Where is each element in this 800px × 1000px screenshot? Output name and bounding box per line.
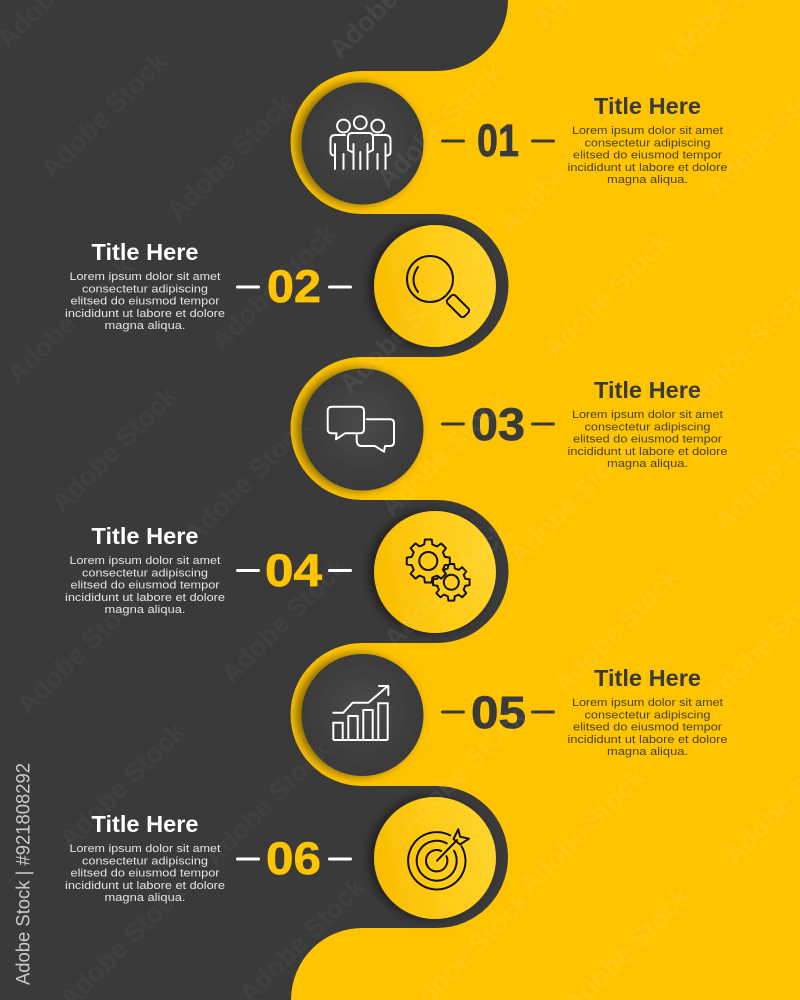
icon: chat bubbles — [328, 407, 394, 452]
watermarks on yellow area — [323, 0, 800, 1000]
body 05: incididunt ut labore et dolore — [568, 734, 728, 746]
body 03: incididunt ut labore et dolore — [568, 446, 728, 458]
title 01: Title Here — [594, 93, 701, 119]
step 04 circle — [374, 511, 496, 633]
body 04: magna aliqua. — [104, 604, 186, 616]
watermarks on dark area: Adobe Stock — [198, 734, 337, 872]
watermarks on dark area: Adobe Stock — [1, 251, 140, 389]
watermarks on dark area — [0, 0, 372, 1000]
watermarks on yellow area: Adobe Stock — [538, 226, 677, 364]
body 02: magna aliqua. — [104, 320, 186, 332]
step 03 label — [441, 377, 728, 470]
body 06 — [65, 843, 225, 904]
number 01: 01 — [477, 115, 519, 166]
title 06: Title Here — [92, 811, 198, 837]
step 06 circle — [374, 797, 496, 919]
step 04 label — [65, 523, 352, 616]
body 06: elitsed do eiusmod tempor — [70, 868, 220, 880]
watermarks on dark area: Adobe Stock — [35, 46, 174, 184]
body 02: incididunt ut labore et dolore — [65, 308, 225, 320]
number 05: 05 — [471, 687, 526, 738]
left dash 06 — [236, 858, 260, 860]
step 05 label — [441, 665, 728, 758]
body 02: Lorem ipsum dolor sit amet — [70, 271, 221, 283]
step 01 label — [441, 93, 728, 186]
right dash 06 — [328, 858, 352, 860]
icon: people — [330, 116, 390, 169]
watermarks on dark area: Adobe Stock — [215, 551, 354, 689]
left dash 02 — [236, 286, 260, 288]
right dash 03 — [531, 422, 555, 426]
body 01: magna aliqua. — [607, 174, 688, 186]
step 02 circle — [374, 225, 496, 347]
step 05 circle — [302, 654, 424, 776]
watermarks on yellow area: Adobe Stock — [371, 56, 510, 194]
body 05: elitsed do eiusmod tempor — [573, 722, 722, 734]
body 04 — [65, 555, 225, 616]
watermarks on yellow area: Adobe Stock — [378, 516, 517, 654]
body 03: elitsed do eiusmod tempor — [573, 434, 722, 446]
number 06: 06 — [266, 833, 321, 884]
number 03: 03 — [471, 399, 525, 450]
body 06: Lorem ipsum dolor sit amet — [70, 843, 221, 855]
body 03: Lorem ipsum dolor sit amet — [572, 409, 724, 421]
icon: gears — [407, 539, 470, 601]
body 04: consectetur adipiscing — [82, 567, 208, 579]
watermarks on yellow area: Adobe Stock — [503, 432, 642, 570]
body 02: elitsed do eiusmod tempor — [70, 296, 220, 308]
watermarks on dark area: Adobe Stock — [178, 411, 317, 549]
right dash 02 — [328, 286, 352, 288]
watermarks on dark area: Adobe Stock — [11, 582, 150, 720]
watermarks on yellow area: Adobe Stock — [493, 101, 632, 239]
left dash 01 — [441, 140, 465, 142]
body 05: consectetur adipiscing — [584, 709, 710, 721]
body 03: magna aliqua. — [607, 458, 688, 470]
watermarks on yellow area: Adobe Stock — [393, 701, 532, 839]
left dash 04 — [236, 569, 260, 572]
body 06: incididunt ut labore et dolore — [65, 880, 225, 892]
watermarks on yellow area: Adobe Stock — [513, 762, 652, 900]
body 01: elitsed do eiusmod tempor — [573, 150, 722, 162]
side credit: Adobe Stock number: Adobe Stock | #921808292 — [14, 763, 34, 985]
watermarks on dark area: Adobe Stock — [161, 88, 300, 226]
right dash 01 — [531, 140, 555, 142]
body 05: Lorem ipsum dolor sit amet — [572, 697, 724, 709]
step 01 circle — [302, 82, 424, 204]
step 02 label — [65, 239, 352, 332]
watermarks on yellow area: Adobe Stock — [333, 261, 472, 399]
watermarks on dark area: Adobe Stock — [53, 716, 192, 854]
body 03 — [568, 409, 728, 470]
body 01: incididunt ut labore et dolore — [568, 162, 728, 174]
title 03: Title Here — [594, 377, 701, 403]
body 03: consectetur adipiscing — [584, 421, 710, 433]
left dash 05 — [441, 710, 465, 714]
body 04: Lorem ipsum dolor sit amet — [70, 555, 221, 567]
title 02: Title Here — [92, 239, 198, 265]
icon: bar chart with arrow — [333, 686, 388, 740]
body 06: magna aliqua. — [104, 892, 186, 904]
step 03 circle — [302, 368, 424, 490]
right dash 04 — [328, 569, 352, 572]
body 04: incididunt ut labore et dolore — [65, 592, 225, 604]
body 01: consectetur adipiscing — [584, 137, 710, 149]
watermarks on yellow area: Adobe Stock — [548, 561, 687, 699]
background: yellow wavy panel — [290, 0, 800, 1000]
body 05: magna aliqua. — [607, 746, 688, 758]
left dash 03 — [441, 422, 465, 426]
number 04: 04 — [265, 545, 322, 596]
body 02: consectetur adipiscing — [82, 283, 208, 295]
watermarks on yellow area: Adobe Stock — [375, 384, 514, 522]
title 04: Title Here — [92, 523, 198, 549]
body 02 — [65, 271, 225, 332]
step 06 label — [65, 811, 352, 904]
body 01 — [568, 125, 728, 186]
right dash 05 — [531, 710, 555, 714]
icon: magnifier — [407, 256, 470, 318]
title 05: Title Here — [594, 665, 701, 691]
watermarks on dark area: Adobe Stock — [45, 380, 184, 518]
icon: target with arrow — [408, 829, 469, 889]
number 02: 02 — [267, 261, 321, 312]
body 04: elitsed do eiusmod tempor — [70, 580, 220, 592]
body 01: Lorem ipsum dolor sit amet — [572, 125, 724, 137]
body 05 — [568, 697, 728, 758]
body 06: consectetur adipiscing — [82, 855, 208, 867]
watermarks on dark area: Adobe Stock — [205, 218, 344, 356]
